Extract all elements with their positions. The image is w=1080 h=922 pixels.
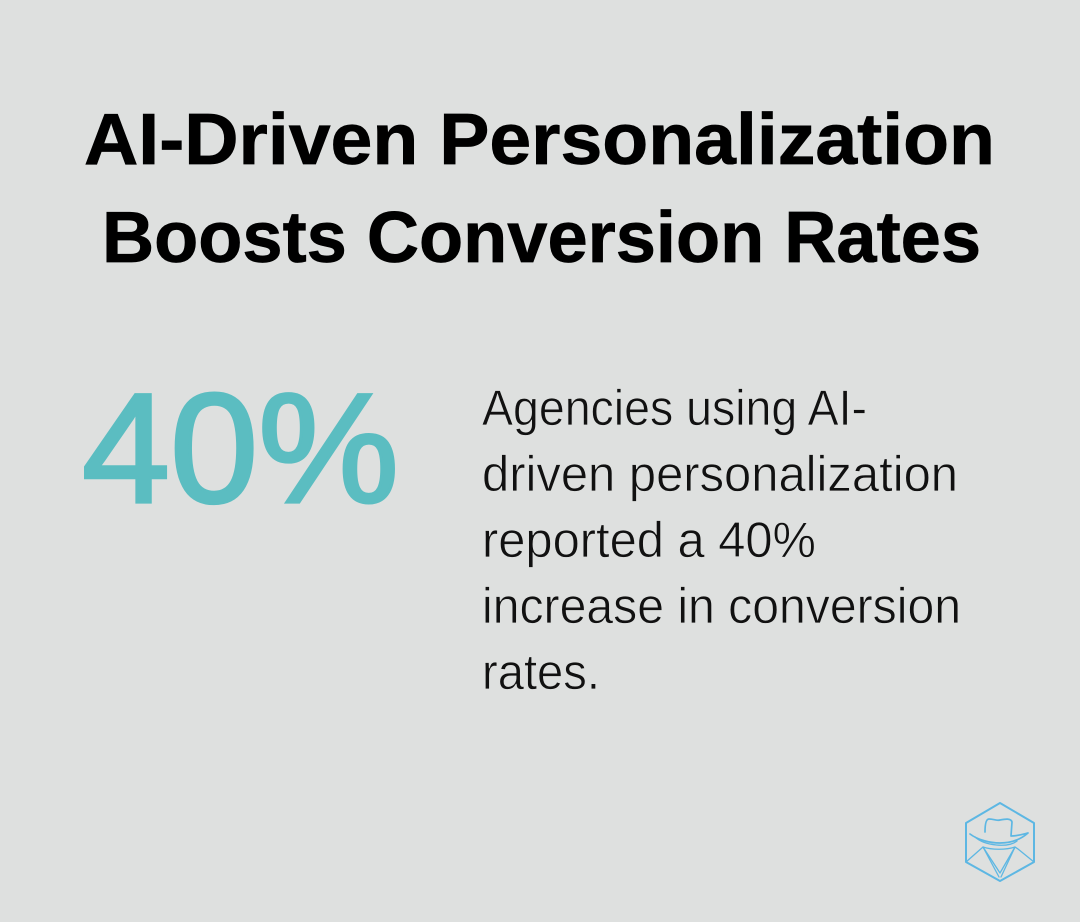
description text: Agencies using AI- xyxy=(482,380,867,436)
description text xyxy=(482,380,961,700)
description text: rates. xyxy=(482,644,600,700)
description text: increase in conversion xyxy=(482,578,961,634)
description text: reported a 40% xyxy=(482,512,816,568)
title: Boosts Conversion Rates xyxy=(102,198,981,278)
big statistic: 40%: 40% xyxy=(82,362,399,536)
title xyxy=(84,100,995,278)
icon: hexagon logo with hat-wearing spy xyxy=(966,803,1034,881)
description text: driven personalization xyxy=(482,446,958,502)
title: AI-Driven Personalization xyxy=(84,100,995,180)
